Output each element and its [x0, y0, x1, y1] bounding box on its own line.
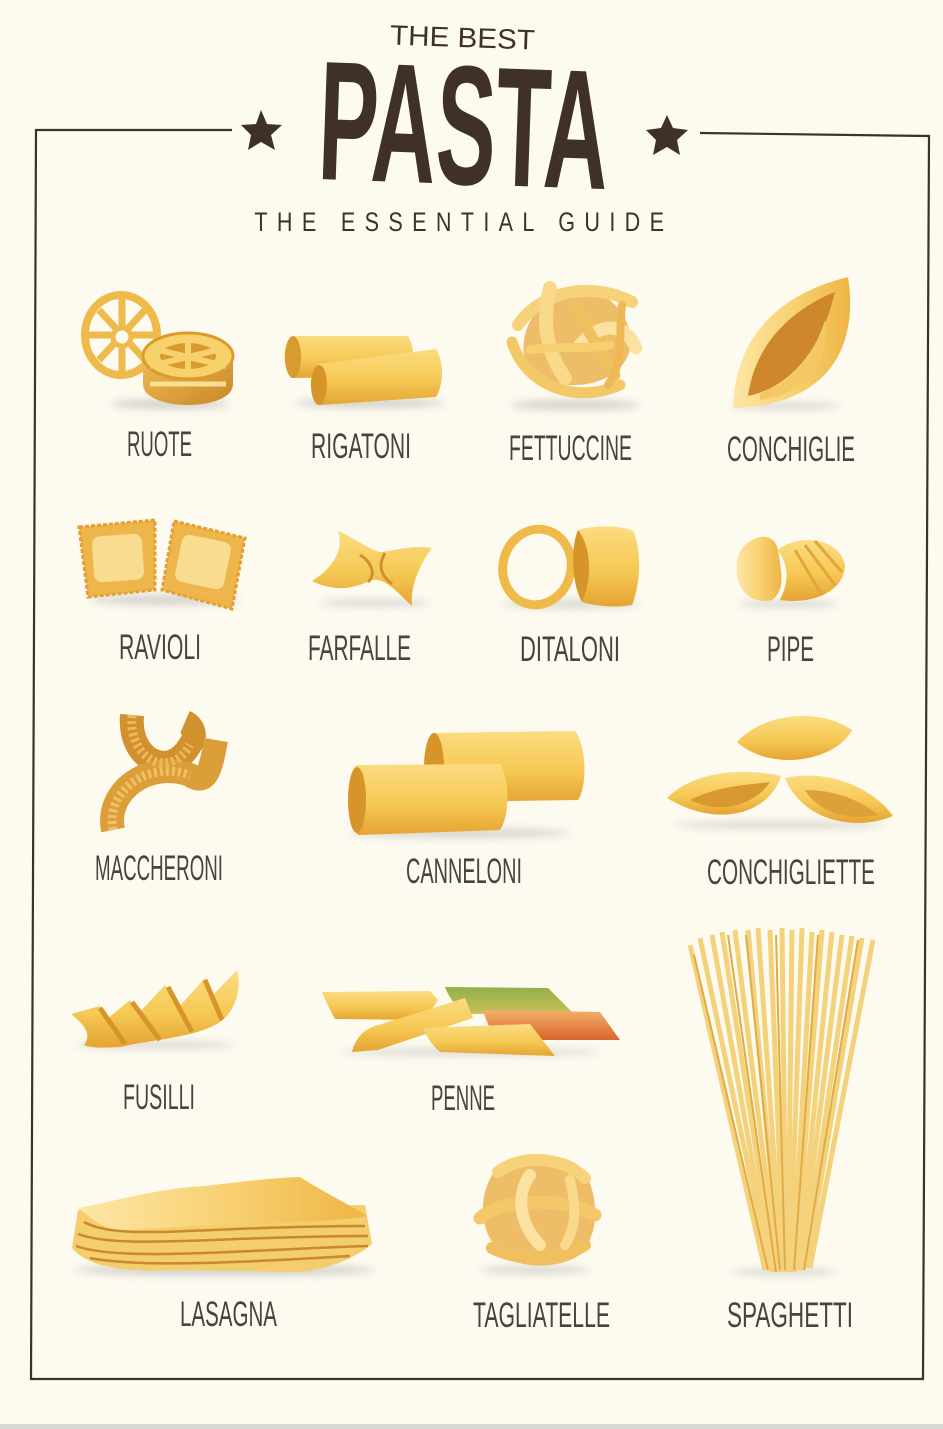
title block: [254, 19, 664, 238]
label: canneloni: CANNELONI: [406, 852, 522, 891]
pasta: pipe: [737, 537, 845, 608]
pasta: maccheroni: [112, 715, 216, 830]
label: fusilli: FUSILLI: [123, 1078, 195, 1117]
title: pasta: PASTA: [316, 26, 612, 226]
pasta: lasagna: [72, 1177, 375, 1276]
pasta: ruote: [85, 295, 233, 409]
pasta: fettuccine: [510, 288, 640, 410]
pasta: conchiglie: [730, 277, 850, 410]
label: ravioli: RAVIOLI: [119, 628, 201, 667]
label: pipe: PIPE: [767, 630, 814, 669]
label: penne: PENNE: [431, 1079, 495, 1118]
pasta: fusilli: [71, 970, 239, 1049]
label: tagliatelle: TAGLIATELLE: [473, 1296, 610, 1335]
label: farfalle: FARFALLE: [308, 629, 411, 668]
pasta: spaghetti: [690, 928, 873, 1276]
pasta: tagliatelle: [480, 1155, 595, 1274]
pasta: ravioli: [79, 520, 245, 609]
label: rigatoni: RIGATONI: [311, 427, 411, 466]
label: maccheroni: MACCHERONI: [95, 849, 223, 888]
label: ruote: RUOTE: [127, 425, 192, 464]
subtitle: THE ESSENTIAL GUIDE: [254, 208, 664, 238]
pasta: farfalle: [312, 531, 432, 607]
title: the best: THE BEST: [390, 19, 536, 56]
pasta: ditaloni: [494, 521, 640, 613]
icon: right star: [646, 115, 688, 155]
icon: left star: [241, 110, 282, 150]
label: conchiglie: CONCHIGLIE: [727, 430, 855, 469]
pasta: conchigliette: [667, 716, 893, 829]
label: lasagna: LASAGNA: [180, 1295, 277, 1334]
label: ditaloni: DITALONI: [520, 630, 620, 669]
pasta: penne: [322, 987, 620, 1056]
label: fettuccine: FETTUCCINE: [509, 429, 632, 468]
label: spaghetti: SPAGHETTI: [727, 1296, 853, 1335]
pasta: rigatoni: [284, 336, 445, 408]
pasta: canneloni: [348, 731, 584, 838]
